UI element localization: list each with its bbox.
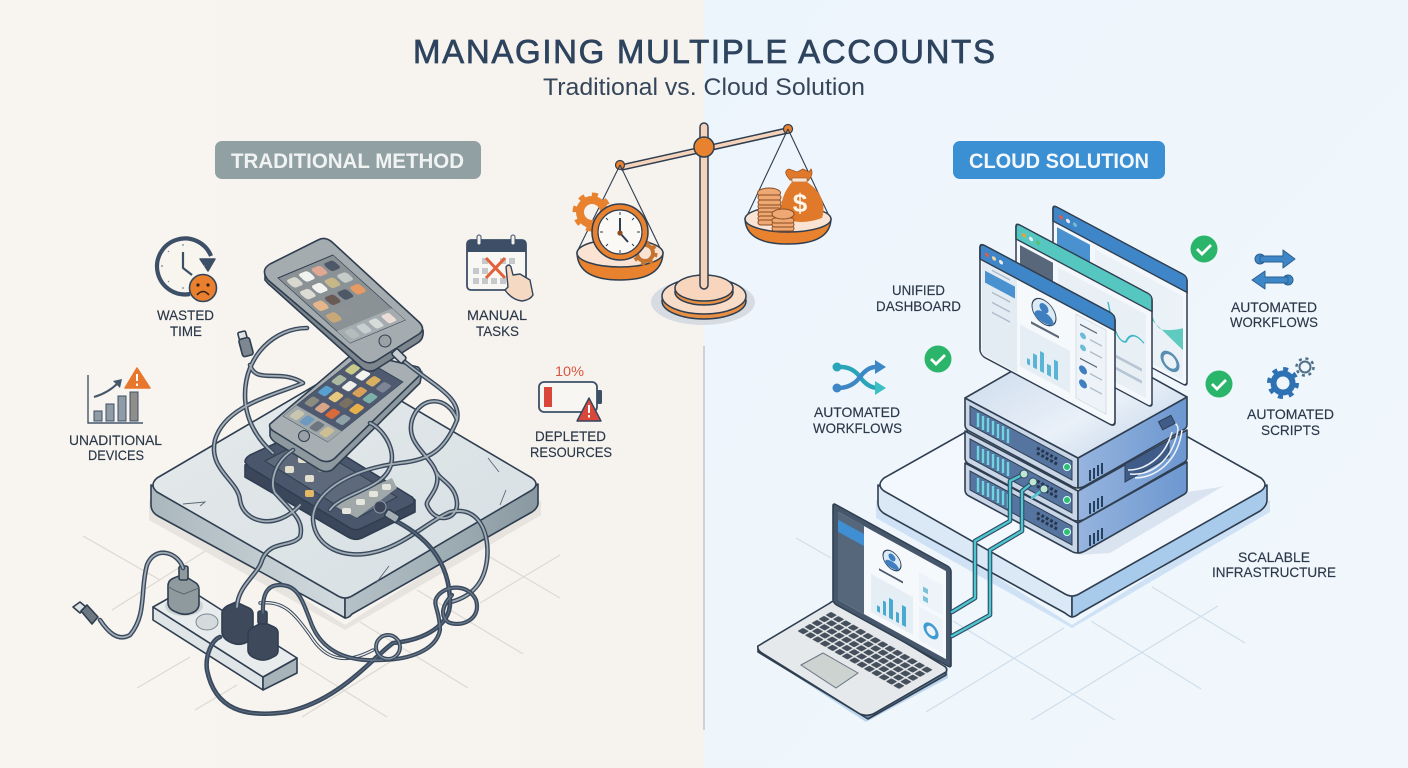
charger dark 1 bbox=[222, 602, 253, 644]
laptop base bbox=[757, 646, 948, 722]
heading: cloud solution: CLOUD SOLUTION bbox=[969, 150, 1149, 173]
laptop keyboard bbox=[796, 611, 934, 690]
label: automated workflows right: WORKFLOWS bbox=[1230, 314, 1318, 330]
floor grid left bbox=[83, 536, 560, 717]
cable connector: bottom phone bbox=[384, 509, 400, 523]
label: wasted time: TIME bbox=[170, 323, 202, 339]
balance scale bbox=[575, 123, 831, 325]
scale base bbox=[651, 275, 755, 325]
dark cables bbox=[207, 518, 450, 714]
grey cables outer bbox=[100, 328, 488, 637]
heading: traditional method bbox=[215, 141, 481, 179]
label: depleted resources: RESOURCES bbox=[530, 444, 612, 460]
browser window middle bbox=[1016, 223, 1152, 407]
icon: check 2 bbox=[924, 346, 952, 372]
label: manual tasks: TASKS bbox=[476, 323, 519, 339]
icon: manual tasks calendar bbox=[467, 235, 533, 301]
phone middle bbox=[270, 353, 422, 472]
label: automated workflows left: WORKFLOWS bbox=[813, 420, 902, 436]
label: unaditional devices: UNADITIONAL bbox=[69, 432, 162, 448]
label: automated workflows left: AUTOMATED bbox=[814, 404, 900, 420]
charger grey bbox=[165, 566, 203, 616]
label: automated scripts: AUTOMATED bbox=[1247, 406, 1334, 422]
server stack bbox=[965, 335, 1187, 553]
label: automated scripts bbox=[1247, 406, 1334, 438]
phone bottom bbox=[245, 432, 415, 539]
label: unified dashboard bbox=[876, 282, 961, 314]
knot bbox=[376, 635, 400, 659]
subtitle: Traditional vs. Cloud Solution bbox=[543, 74, 865, 101]
right pan with coins and money bag: $ bbox=[793, 188, 808, 218]
label: manual tasks bbox=[467, 307, 527, 339]
stone slab left bbox=[149, 370, 541, 630]
label: depleted resources bbox=[530, 428, 612, 460]
title: MANAGING MULTIPLE ACCOUNTS bbox=[413, 33, 995, 70]
right background bbox=[704, 0, 1408, 768]
icon: unaditional devices chart bbox=[88, 368, 150, 423]
server side ports bbox=[1125, 415, 1182, 482]
cables bbox=[100, 328, 488, 714]
icon: automated workflows arrows right bbox=[1252, 250, 1295, 289]
right pan with coins and money bag bbox=[745, 169, 831, 244]
scale strings bbox=[577, 129, 830, 252]
charger dark 2 bbox=[248, 611, 278, 660]
scale post bbox=[700, 123, 708, 289]
label: scalable infrastructure: INFRASTRUCTURE bbox=[1212, 564, 1336, 580]
network cables bbox=[952, 470, 1048, 636]
icon: check 3 bbox=[1206, 370, 1232, 398]
label: manual tasks: MANUAL bbox=[467, 307, 527, 323]
label: unaditional devices: DEVICES bbox=[88, 447, 144, 463]
label: unified dashboard: UNIFIED bbox=[892, 282, 945, 298]
label: automated workflows left bbox=[813, 404, 902, 436]
label: scalable infrastructure bbox=[1212, 549, 1336, 580]
browser window back bbox=[1053, 205, 1187, 386]
icon: depleted battery bbox=[539, 363, 602, 421]
center divider bbox=[703, 346, 705, 730]
scale beam bbox=[621, 128, 788, 170]
label: depleted resources: DEPLETED bbox=[535, 428, 606, 444]
label: automated scripts: SCRIPTS bbox=[1261, 422, 1320, 438]
thin grey cable bbox=[260, 603, 373, 658]
left background bbox=[0, 0, 704, 768]
power strip bbox=[153, 588, 297, 690]
laptop trackpad bbox=[801, 653, 858, 688]
label: automated workflows right: AUTOMATED bbox=[1231, 299, 1317, 315]
left pan with clock and gears bbox=[575, 195, 663, 280]
cable connector: top phone bbox=[391, 348, 407, 364]
cable connector: usb top bbox=[237, 330, 254, 357]
platform right bbox=[876, 374, 1270, 628]
icon: gears bbox=[1269, 358, 1314, 397]
server top face bbox=[965, 335, 1187, 458]
heading: cloud solution bbox=[953, 141, 1165, 179]
phone top bbox=[264, 238, 423, 371]
label: unaditional devices bbox=[69, 432, 162, 463]
icon: wasted time bbox=[157, 238, 216, 302]
label: wasted time bbox=[157, 307, 214, 339]
label: automated workflows right bbox=[1230, 299, 1318, 330]
floor grid right bbox=[796, 538, 1245, 720]
laptop screen bbox=[833, 503, 951, 668]
laptop bbox=[757, 503, 951, 722]
browser window front dashboard bbox=[980, 243, 1115, 427]
scale pivot bbox=[694, 137, 714, 157]
label: unified dashboard: DASHBOARD bbox=[876, 298, 961, 314]
label: wasted time: WASTED bbox=[157, 307, 214, 323]
icon: check 1 bbox=[1190, 236, 1218, 262]
label: scalable infrastructure: SCALABLE bbox=[1238, 549, 1310, 565]
icon: depleted battery: 10% bbox=[555, 363, 584, 379]
cable connector: usb left bbox=[73, 602, 98, 624]
icon: shuffle arrows bbox=[832, 360, 886, 395]
heading: traditional method: TRADITIONAL METHOD bbox=[231, 150, 464, 173]
